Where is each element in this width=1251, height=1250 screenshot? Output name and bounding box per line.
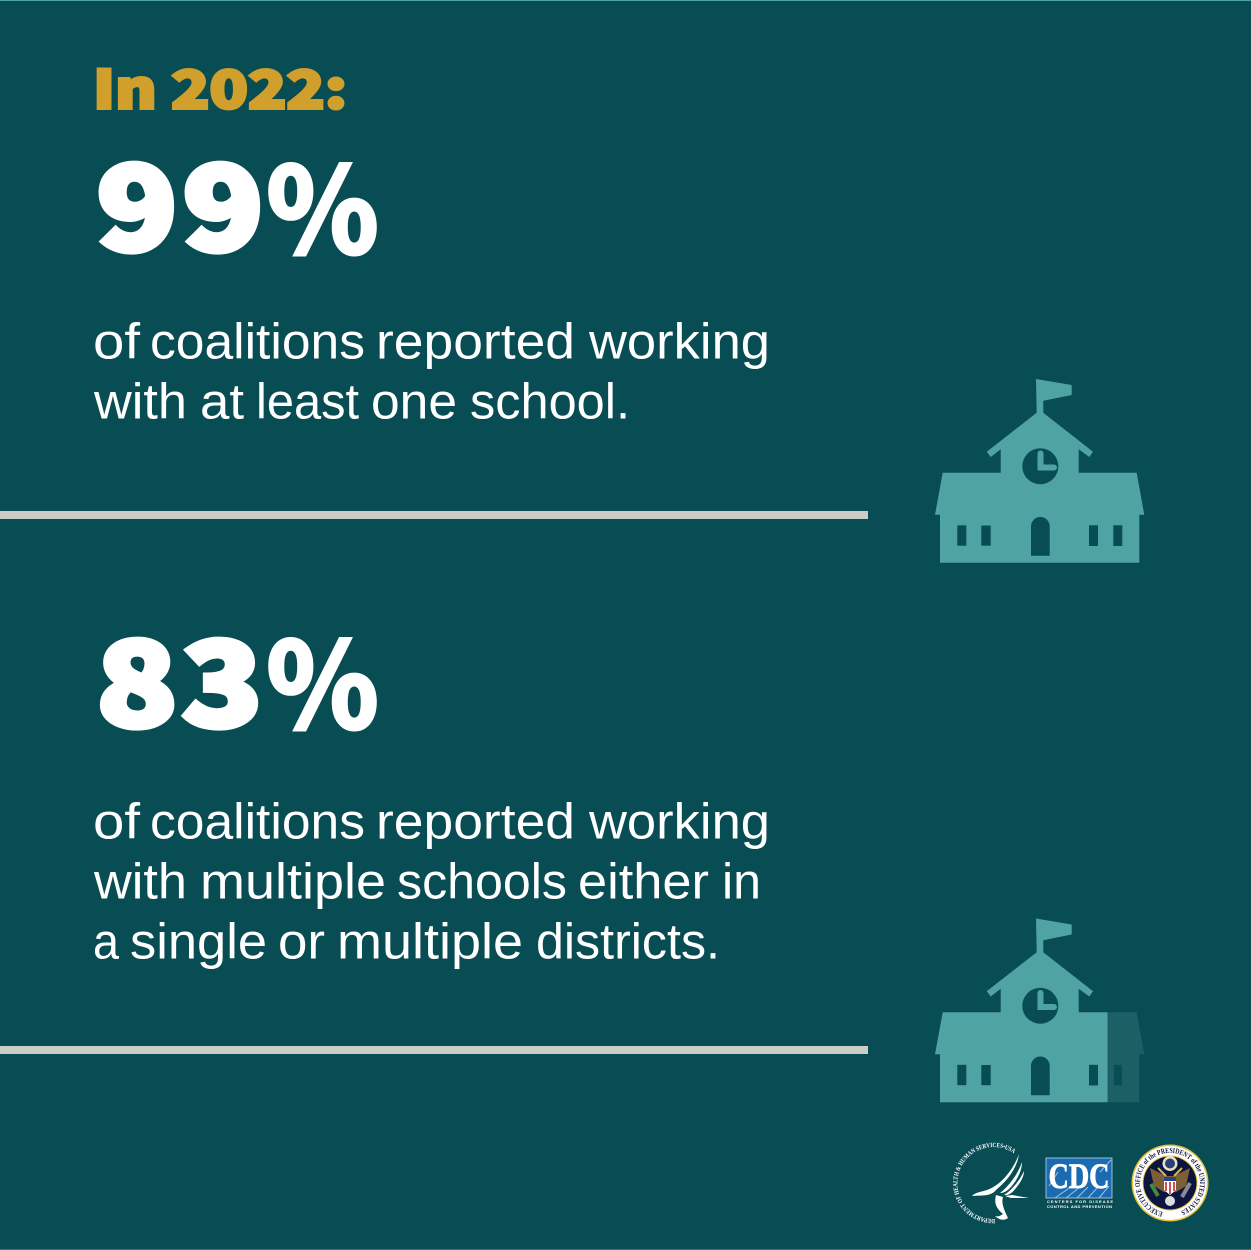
text block: first statistic description: at bbox=[200, 374, 244, 430]
logo: Executive Office of the President seal: EXECUTIVE OFFICE of the PRESIDENT of the UNITED STATES bbox=[1135, 1148, 1205, 1217]
logo: CDC bbox=[1046, 1156, 1113, 1209]
icon: school full bbox=[935, 379, 1144, 563]
text block: second statistic description: of bbox=[93, 794, 140, 850]
statistic: 99%: % bbox=[266, 115, 379, 289]
icon: school partly filled bbox=[935, 918, 1144, 1102]
text block: first statistic description: with bbox=[93, 374, 187, 430]
logo: CDC: CONTROL AND PREVENTION bbox=[1047, 1204, 1112, 1209]
logo: CDC: CENTERS FOR DISEASE bbox=[1047, 1199, 1113, 1204]
text block: second statistic description: districts. bbox=[536, 914, 720, 970]
statistic: 83%: 8 bbox=[97, 594, 177, 759]
text block: first statistic description: least bbox=[256, 374, 359, 430]
text block: second statistic description: a bbox=[93, 914, 119, 970]
text block: first statistic description: school. bbox=[470, 374, 630, 430]
text block: second statistic description: coalitions bbox=[150, 794, 365, 850]
heading: In 2022: In 2022: bbox=[93, 48, 347, 124]
text block: second statistic description: schools bbox=[397, 854, 567, 910]
text block: second statistic description: or bbox=[278, 914, 325, 970]
text block: second statistic description: reported bbox=[376, 794, 575, 850]
text block: second statistic description: with bbox=[93, 854, 187, 910]
logo: HHS: DEPARTMENT OF HEALTH & HUMAN SERVICES•USA bbox=[953, 1142, 1015, 1224]
text block: first statistic description: reported bbox=[376, 314, 575, 370]
text block: second statistic description bbox=[93, 794, 770, 970]
text block: second statistic description: multiple bbox=[200, 854, 386, 910]
statistic: 99%: 9 bbox=[183, 118, 263, 283]
statistic: 99%: 9 bbox=[97, 118, 177, 283]
statistic: 83%: 3 bbox=[182, 594, 262, 759]
text block: first statistic description: one bbox=[371, 374, 457, 430]
text block: second statistic description: multiple bbox=[337, 914, 523, 970]
text block: first statistic description bbox=[93, 314, 770, 430]
text block: first statistic description: of bbox=[93, 314, 140, 370]
logo: CDC: CDC bbox=[1048, 1156, 1110, 1196]
text block: second statistic description: working bbox=[588, 794, 770, 850]
statistic: 83%: % bbox=[266, 590, 379, 764]
text block: first statistic description: working bbox=[588, 314, 770, 370]
divider two bbox=[0, 1046, 868, 1054]
text block: second statistic description: in bbox=[722, 854, 761, 910]
text block: second statistic description: either bbox=[578, 854, 709, 910]
text block: first statistic description: coalitions bbox=[150, 314, 365, 370]
text block: second statistic description: single bbox=[130, 914, 267, 970]
divider one bbox=[0, 511, 868, 519]
